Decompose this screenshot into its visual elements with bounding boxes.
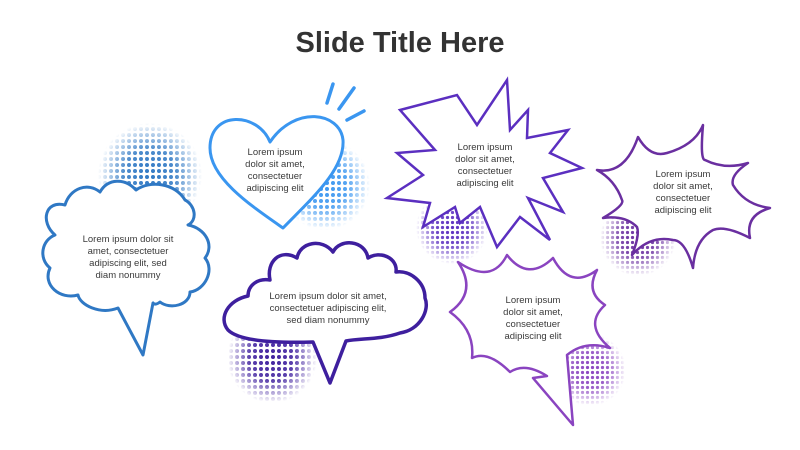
panel: starburst 3: dolor sit amet, bbox=[503, 307, 563, 318]
panel: starburst 2: adipiscing elit bbox=[654, 205, 712, 216]
panel: cloud bubble 1: amet, consectetuer bbox=[88, 246, 168, 257]
title: Slide Title Here bbox=[296, 27, 504, 59]
panel: heart bubble: dolor sit amet, bbox=[245, 159, 305, 170]
halftone: star 2 bbox=[601, 218, 674, 274]
panel: cloud bubble 1: Lorem ipsum dolor sit bbox=[83, 234, 174, 245]
panel: heart bubble: Lorem ipsum bbox=[248, 147, 303, 158]
halftone: heart bbox=[296, 146, 369, 227]
panel: starburst 1: consectetuer bbox=[458, 166, 512, 177]
panel: heart bubble: adipiscing elit bbox=[246, 183, 304, 194]
panel: cloud bubble 2: consectetuer adipiscing elit, bbox=[270, 303, 386, 314]
panel: cloud bubble 1: diam nonummy bbox=[96, 270, 161, 281]
halftone: star 1 bbox=[417, 206, 487, 263]
panel: starburst 2 bbox=[597, 125, 770, 268]
panel: starburst 3: Lorem ipsum bbox=[506, 295, 561, 306]
halftone: cloud 1 bbox=[100, 124, 200, 202]
panel: starburst 1: dolor sit amet, bbox=[455, 154, 515, 165]
icon: heart rays bbox=[327, 84, 364, 120]
panel: starburst 1: adipiscing elit bbox=[456, 178, 514, 189]
panel: starburst 1 bbox=[387, 80, 582, 247]
panel: cloud bubble 1 bbox=[43, 181, 209, 355]
panel: cloud bubble 2 bbox=[224, 243, 426, 383]
halftone: star 3 bbox=[568, 337, 624, 404]
panel: cloud bubble 2: Lorem ipsum dolor sit amet, bbox=[269, 291, 387, 302]
panel: starburst 1: Lorem ipsum bbox=[458, 142, 513, 153]
panel: starburst 3: adipiscing elit bbox=[504, 331, 562, 342]
panel: starburst 2: Lorem ipsum bbox=[656, 169, 711, 180]
panel: heart bubble bbox=[210, 117, 343, 228]
panel: cloud bubble 2: sed diam nonummy bbox=[287, 315, 370, 326]
panel: starburst 3 bbox=[450, 255, 610, 425]
panel: starburst 2: dolor sit amet, bbox=[653, 181, 713, 192]
panel: starburst 3: consectetuer bbox=[506, 319, 560, 330]
panel: heart bubble: consectetuer bbox=[248, 171, 302, 182]
panel: starburst 2: consectetuer bbox=[656, 193, 710, 204]
halftone: cloud 2 bbox=[229, 337, 316, 401]
panel: cloud bubble 1: adipiscing elit, sed bbox=[89, 258, 167, 269]
